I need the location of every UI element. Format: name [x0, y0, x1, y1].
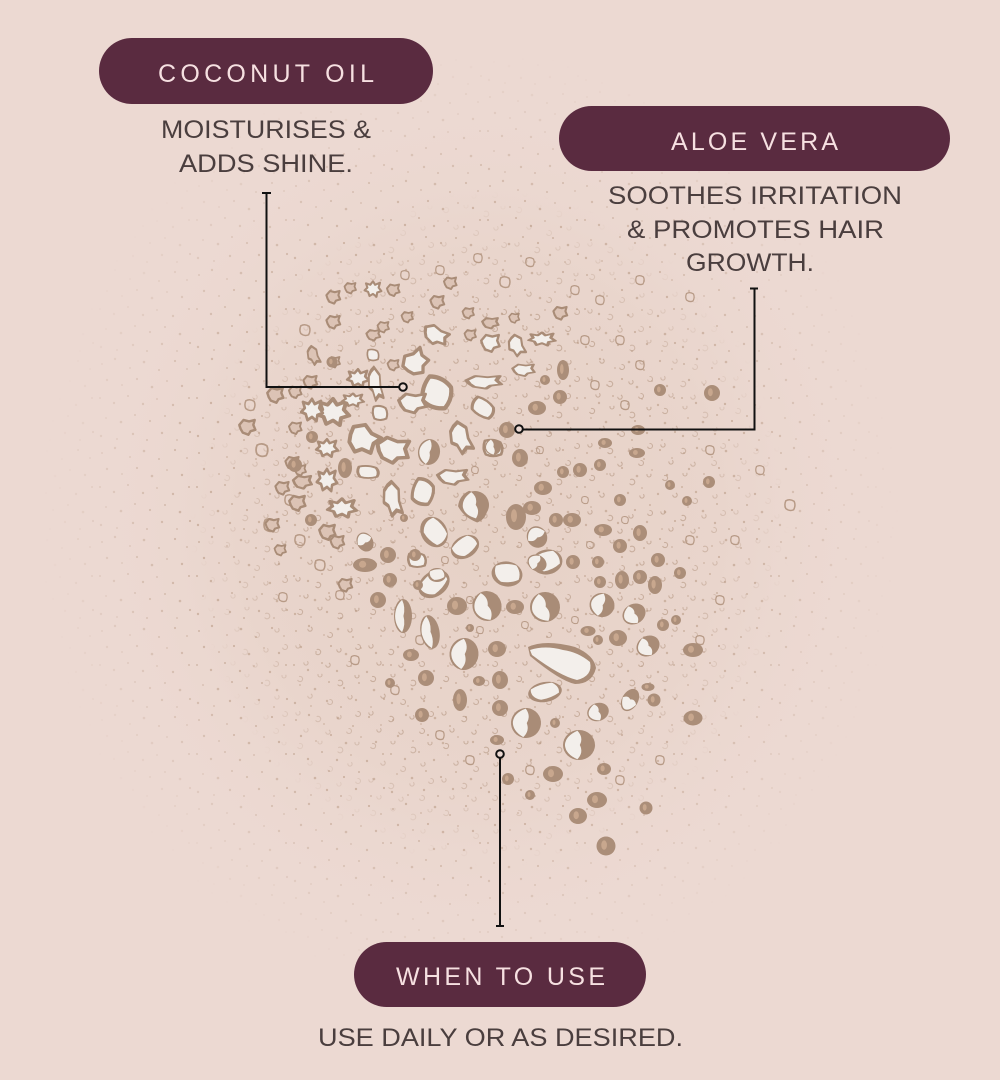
text: aloe vera benefit: GROWTH.	[686, 249, 814, 277]
heading pill: aloe vera: ALOE VERA	[671, 128, 838, 156]
heading pill: when to use: WHEN TO USE	[396, 963, 605, 991]
text: coconut oil benefit: ADDS SHINE.	[179, 150, 353, 178]
text: usage: USE DAILY OR AS DESIRED.	[318, 1024, 683, 1052]
panel: when to use	[318, 942, 683, 1052]
heading pill: when to use	[354, 942, 646, 1007]
callout line: coconut oil	[262, 193, 407, 391]
callout line: aloe vera	[515, 288, 758, 433]
droplets: irregular upper cluster	[301, 281, 555, 567]
water droplet texture	[70, 83, 870, 940]
heading pill: aloe vera	[559, 106, 950, 171]
heading pill: coconut oil: COCONUT OIL	[158, 60, 374, 88]
text: aloe vera benefit	[608, 182, 902, 277]
heading pill: coconut oil	[99, 38, 433, 104]
text: aloe vera benefit: SOOTHES IRRITATION	[608, 182, 902, 210]
text: aloe vera benefit: & PROMOTES HAIR	[627, 216, 884, 244]
text: coconut oil benefit: MOISTURISES &	[161, 116, 371, 144]
callout line: when to use	[496, 750, 504, 926]
droplets: tan irregular upper cluster	[239, 278, 567, 592]
text: coconut oil benefit	[161, 116, 371, 178]
panel: aloe vera	[559, 106, 950, 277]
panel: coconut oil	[99, 38, 433, 178]
droplets: half lit large	[353, 437, 663, 760]
droplets: small brown	[288, 356, 720, 856]
